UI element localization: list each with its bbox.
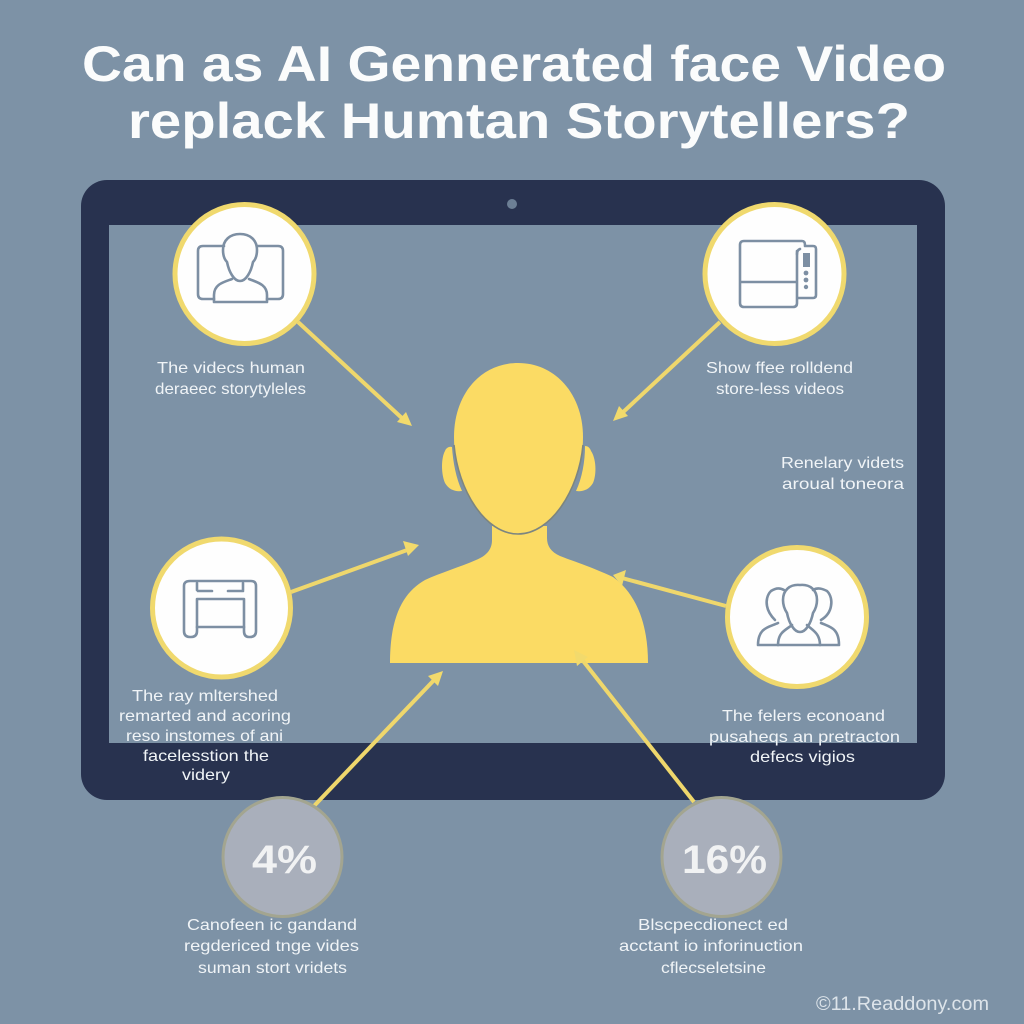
- panel: middle right item: [709, 548, 900, 766]
- caption: middle right: [709, 708, 900, 766]
- caption: 16% stat: cflecseletsine: [661, 960, 766, 977]
- panel: top left item: [155, 204, 314, 398]
- caption: 16% stat: acctant io inforinuction: [619, 938, 803, 955]
- title: Can as AI Gennerated face Video: [82, 36, 946, 92]
- stat circle: 16%: [662, 798, 781, 916]
- panel: middle left item: [119, 539, 291, 784]
- caption: 4% stat: suman stort vridets: [198, 960, 347, 977]
- icon circle: group of people: [728, 548, 866, 686]
- arrow: middle left to person: [291, 541, 419, 592]
- arrow: middle right to person: [613, 570, 726, 606]
- caption: top right: Show ffee rolldend: [706, 360, 853, 377]
- icon circle: person on screen: [175, 204, 314, 344]
- credit line: ©11.Readdony.com: [816, 994, 989, 1015]
- caption: middle right: defecs vigios: [750, 749, 855, 766]
- panel: 4% stat: [184, 798, 359, 977]
- caption: middle right: The felers econoand: [722, 708, 885, 725]
- stat circle: 4%: [223, 798, 342, 916]
- caption: middle left: remarted and acoring: [119, 708, 291, 725]
- caption: middle left: reso instomes of ani: [126, 728, 283, 745]
- stat circle: 4%: 4%: [252, 838, 317, 882]
- caption: top left: deraeec storytyleles: [155, 381, 306, 398]
- caption: top right: store-less videos: [716, 381, 844, 398]
- caption: middle left: The ray mltershed: [132, 688, 278, 705]
- caption: middle left: [119, 688, 291, 784]
- caption: 4% stat: regdericed tnge vides: [184, 938, 359, 955]
- caption: middle left: facelesstion the: [143, 748, 269, 765]
- caption: 4% stat: [184, 917, 359, 977]
- caption: top right: [706, 360, 853, 398]
- panel: top right item: [705, 204, 853, 398]
- title: replack Humtan Storytellers?: [128, 93, 910, 149]
- text block: right side caption: Renelary videts: [781, 455, 904, 472]
- stat circle: 16%: 16%: [682, 838, 767, 882]
- icon circle: video device: [705, 204, 844, 344]
- arrow: top right to person: [613, 322, 720, 421]
- panel: tablet device frame: [81, 180, 945, 800]
- caption: top left: The videcs human: [157, 360, 305, 377]
- caption: top left: [155, 360, 306, 398]
- caption: middle left: videry: [182, 767, 230, 784]
- caption: 16% stat: Blscpecdionect ed: [638, 917, 788, 934]
- arrow: bottom left stat to person: [314, 671, 443, 806]
- text block: right side caption: aroual toneora: [782, 476, 904, 493]
- central yellow person silhouette: [390, 363, 648, 663]
- arrow: top left to person: [298, 322, 412, 426]
- icon circle: frame: [152, 539, 290, 677]
- caption: middle right: pusaheqs an pretracton: [709, 729, 900, 746]
- caption: 16% stat: [619, 917, 803, 977]
- arrow: bottom right stat to person: [574, 650, 694, 802]
- caption: 4% stat: Canofeen ic gandand: [187, 917, 357, 934]
- title: [82, 36, 946, 149]
- panel: 16% stat: [619, 798, 803, 977]
- text block: right side caption: [781, 455, 904, 493]
